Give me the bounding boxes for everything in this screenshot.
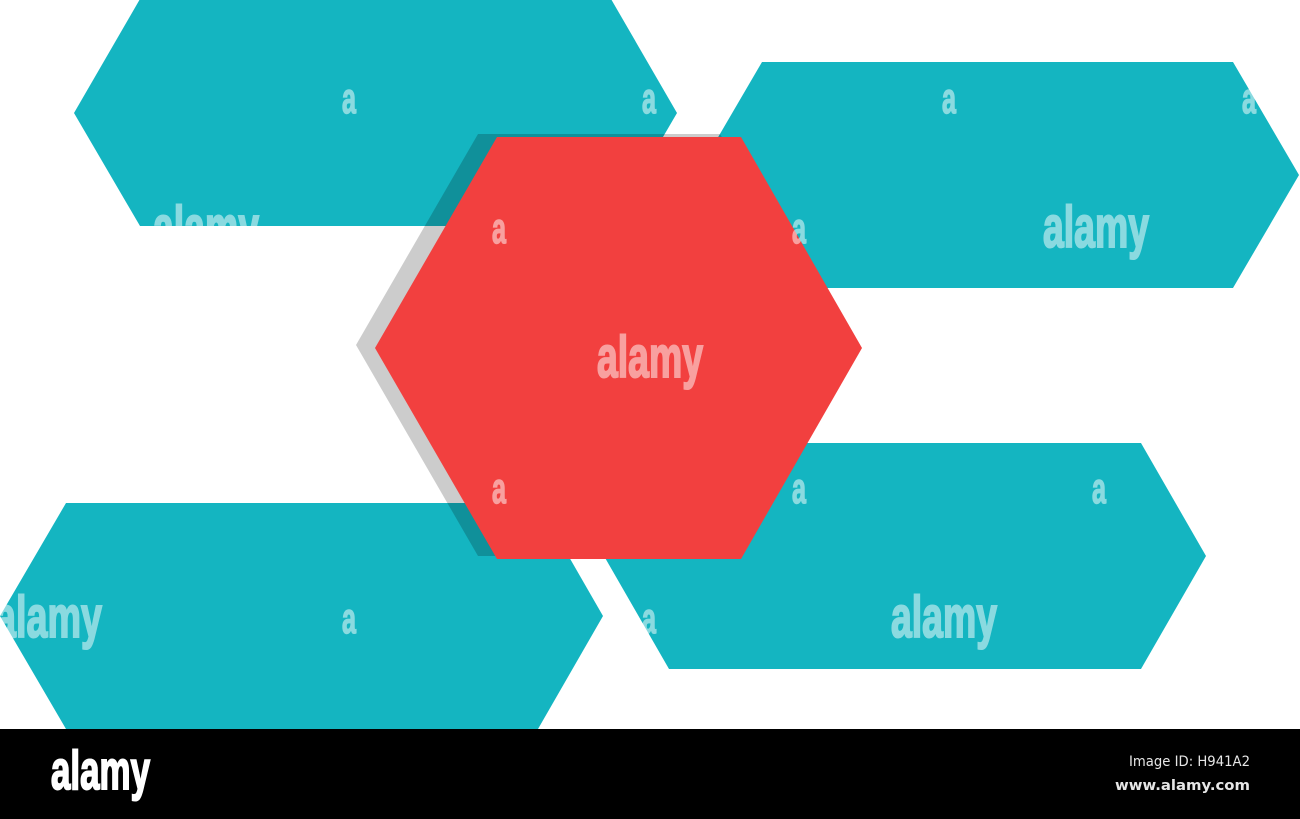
watermark text: a — [1242, 75, 1257, 123]
panel: teal hexagon bottom left — [0, 503, 603, 729]
watermark text: a — [492, 205, 507, 253]
panel: teal hexagon bottom right — [604, 443, 1206, 669]
watermark text: a — [642, 595, 657, 643]
footer logo: alamy — [51, 739, 150, 801]
central red hexagon — [375, 137, 862, 559]
watermark text: a — [942, 75, 957, 123]
watermark text: a — [642, 75, 657, 123]
watermark text: a — [792, 465, 807, 513]
watermark text: a — [792, 205, 807, 253]
watermark text: a — [1092, 465, 1107, 513]
watermark text — [0, 75, 1257, 650]
watermark text: a — [492, 465, 507, 513]
image id: Image ID: H941A2 — [1129, 754, 1250, 770]
panel: teal hexagon top left — [74, 0, 677, 226]
watermark text: alamy — [153, 195, 259, 260]
footer bar — [0, 729, 1300, 819]
watermark text: alamy — [597, 325, 703, 390]
watermark text: a — [342, 595, 357, 643]
hexagon shadow — [356, 134, 842, 556]
panel: teal hexagon top right — [696, 62, 1299, 288]
watermark text: a — [342, 75, 357, 123]
website url: www.alamy.com — [1115, 778, 1250, 794]
watermark text: alamy — [891, 585, 997, 650]
watermark text: alamy — [1043, 195, 1149, 260]
